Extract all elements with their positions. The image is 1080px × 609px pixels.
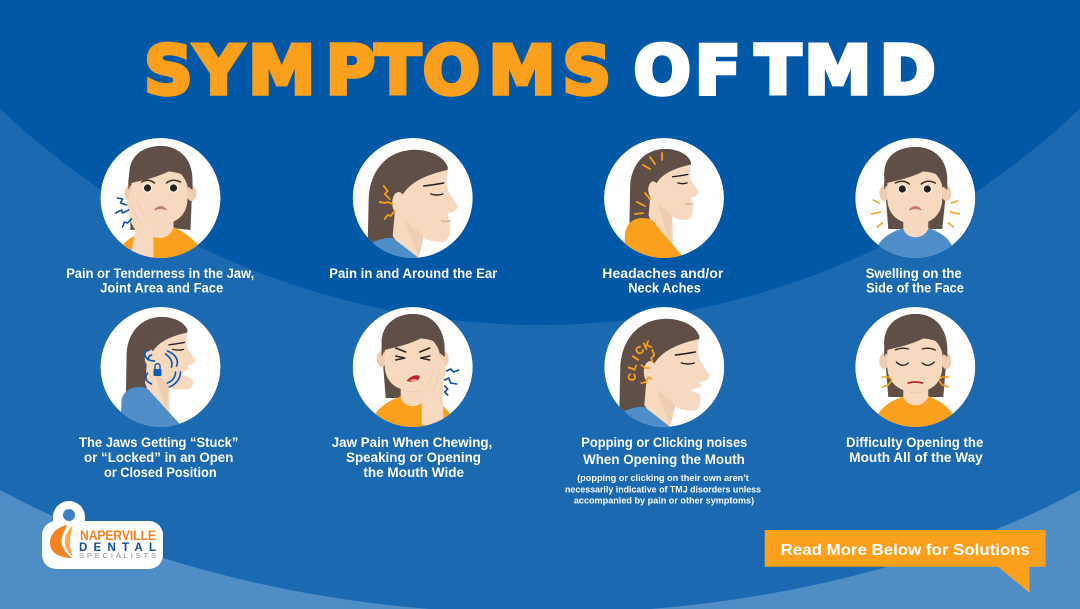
caption: or Closed Position — [104, 465, 217, 480]
logo: Naperville Dental Specialists — [42, 501, 163, 569]
callout: read more — [765, 530, 1046, 593]
title: M — [805, 32, 871, 110]
icon: woman with closed eyes — [855, 307, 976, 427]
caption: Pain or Tenderness in the Jaw, — [66, 266, 254, 281]
caption: Popping or Clicking noises — [581, 435, 747, 450]
caption: Headaches and/or — [602, 266, 724, 281]
title: SYMPTOMS — [144, 32, 611, 110]
caption: accompanied by pain or other symptoms) — [574, 496, 754, 506]
caption: When Opening the Mouth — [583, 452, 745, 467]
callout: read more: Read More Below for Solutions — [781, 542, 1030, 559]
caption: The Jaws Getting “Stuck” — [79, 435, 238, 450]
caption — [866, 266, 964, 296]
caption: Difficulty Opening the — [846, 435, 984, 450]
title — [144, 32, 936, 110]
caption — [602, 266, 724, 296]
icon: profile with click — [604, 307, 724, 427]
caption: (popping or clicking on their own aren’t — [577, 473, 749, 483]
caption: Neck Aches — [628, 280, 701, 296]
title: OF — [634, 32, 741, 110]
panel: locked jaw — [79, 307, 238, 480]
caption — [66, 266, 254, 296]
icon: woman holding jaw — [100, 138, 220, 258]
panel: popping or clicking — [565, 307, 761, 506]
title: T — [755, 32, 801, 110]
panel: pain in jaw — [66, 138, 254, 296]
caption: or “Locked” in an Open — [84, 450, 233, 465]
panel: ear pain — [329, 138, 498, 281]
caption: necessarily indicative of TMJ disorders unless — [565, 484, 761, 494]
panel: headaches — [602, 138, 724, 296]
logo: Naperville Dental Specialists: DENTAL — [79, 542, 156, 554]
caption: Joint Area and Face — [100, 280, 224, 296]
caption: the Mouth Wide — [363, 465, 465, 480]
panel: difficulty opening — [845, 307, 985, 465]
logo: Naperville Dental Specialists: SPECIALISTS — [79, 551, 156, 560]
caption: Mouth All of the Way — [849, 450, 983, 465]
icon: profile with ear pain — [352, 138, 473, 258]
icon: padlock — [154, 364, 162, 376]
caption — [565, 435, 761, 506]
logo: Naperville Dental Specialists: NAPERVILLE — [80, 527, 156, 543]
icon: woman in pain with open mouth — [352, 307, 473, 427]
panel: swelling — [855, 138, 976, 292]
icon: woman with swollen face — [855, 138, 976, 258]
panel: jaw pain chewing — [332, 307, 492, 480]
caption — [332, 435, 492, 480]
caption: Pain in and Around the Ear — [329, 266, 498, 281]
icon: profile with headache — [604, 138, 724, 258]
icon: click lettering: CLICK — [626, 339, 654, 382]
caption — [79, 435, 238, 480]
icon: profile with locked jaw — [100, 307, 220, 427]
caption: Jaw Pain When Chewing, — [332, 435, 492, 450]
caption: Side of the Face — [866, 280, 964, 296]
caption: Speaking or Opening — [346, 450, 481, 465]
caption — [846, 435, 984, 465]
title: D — [880, 32, 936, 110]
caption: Swelling on the — [866, 266, 962, 281]
